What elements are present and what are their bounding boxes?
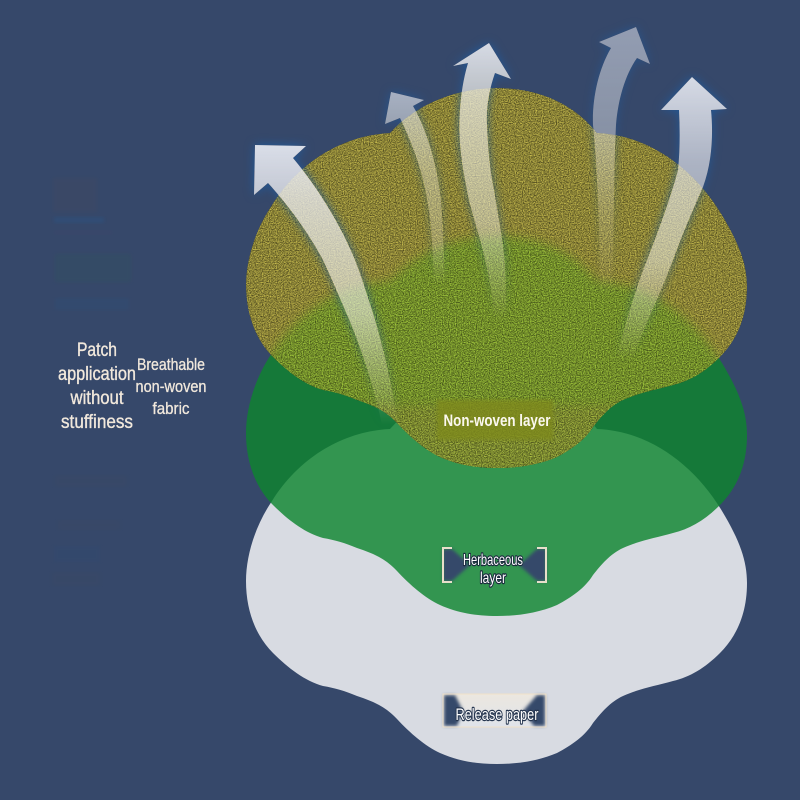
text: Patch application without stuffiness: Patch <box>77 340 117 361</box>
label: Non-woven layer: Non-woven layer <box>444 411 551 430</box>
text: Patch application without stuffiness: without <box>70 388 124 409</box>
text: Release paper: Release paper <box>456 705 539 724</box>
arrow 2 <box>385 92 445 285</box>
text: Breathable non-woven fabric: fabric <box>152 400 190 418</box>
layer: release paper <box>246 384 747 764</box>
text: Patch application without stuffiness: application <box>58 364 136 385</box>
text: Herbaceous layer: Herbaceous <box>463 552 523 569</box>
text: Breathable non-woven fabric: non-woven <box>136 378 206 396</box>
arrow 4 <box>593 27 650 295</box>
layer: herbaceous <box>246 236 747 616</box>
text: Breathable non-woven fabric <box>136 356 206 418</box>
label band: non-woven layer <box>437 400 553 440</box>
faint residual left column marks <box>52 178 131 586</box>
text: Patch application without stuffiness <box>58 340 136 433</box>
text: Herbaceous layer <box>463 552 523 587</box>
arrow 5 <box>616 77 727 360</box>
arrow 3 <box>453 43 511 320</box>
label box: Herbaceous layer <box>443 548 546 587</box>
arrow 1 <box>254 145 398 425</box>
text: Herbaceous layer: layer <box>480 570 506 587</box>
text: Patch application without stuffiness: stuffiness <box>61 412 133 433</box>
text: Breathable non-woven fabric: Breathable <box>137 356 205 374</box>
layer: non-woven textured <box>246 88 747 468</box>
label box: Release paper <box>443 694 546 727</box>
